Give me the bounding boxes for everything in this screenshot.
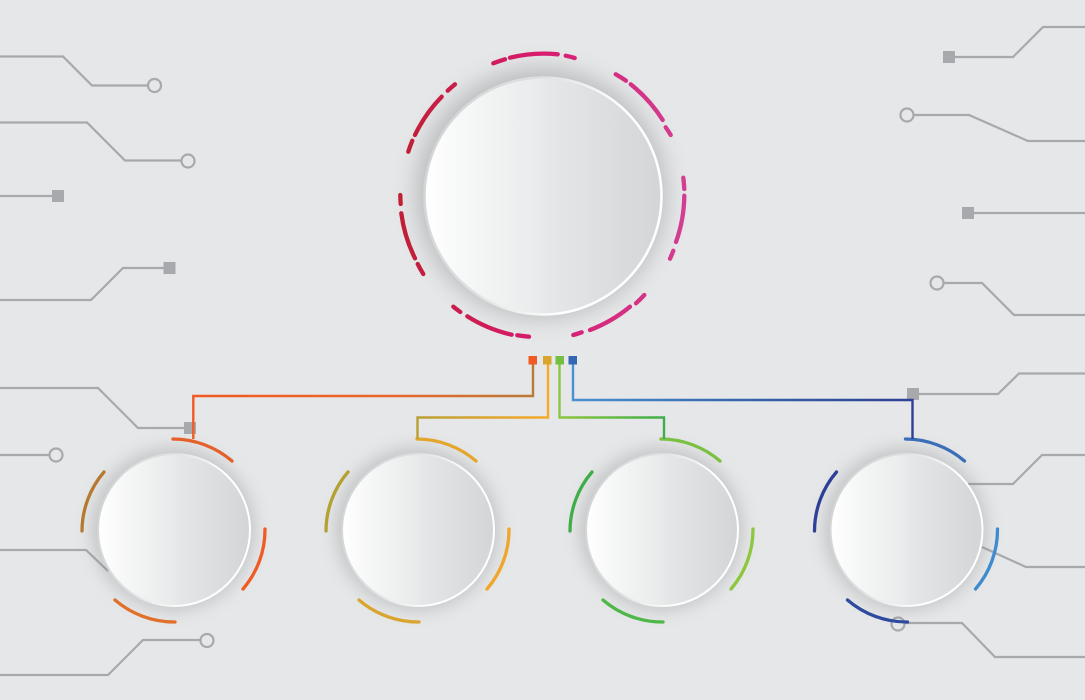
- main circle dashed ring: [400, 54, 684, 337]
- node circle 1: orange: [82, 439, 265, 622]
- trace: right 3 with square node: [962, 207, 1085, 219]
- node circle 2: gold: [326, 439, 509, 622]
- connector: orange: [193, 356, 537, 439]
- connector: green: [556, 356, 664, 439]
- trace: right 1 with square node: [943, 27, 1085, 63]
- trace: right 2 with round node: [900, 108, 1085, 141]
- trace: right 6: [968, 455, 1085, 484]
- circuit traces: left side: [0, 56, 214, 675]
- main circle: [417, 69, 665, 317]
- trace: right 7: [982, 547, 1085, 567]
- trace: left 2 with round node: [0, 122, 194, 168]
- trace: left 7: [0, 550, 108, 571]
- trace: left 8 with round node: [0, 634, 214, 675]
- trace: left 1 with round node: [0, 56, 161, 92]
- trace: left 4 with square node: [0, 262, 176, 300]
- connector: gold: [418, 356, 552, 439]
- circuit traces: right side: [892, 27, 1085, 657]
- connector: blue: [568, 356, 912, 439]
- trace: right 8 with round node: [892, 618, 1085, 657]
- trace: right 5 with square node: [907, 374, 1085, 400]
- trace: left 6 with round node: [0, 448, 62, 462]
- trace: right 4 with round node: [930, 276, 1085, 315]
- node circle 4: blue: [814, 439, 998, 622]
- trace: left 5 with square node: [0, 388, 196, 434]
- node circle 3: green: [570, 439, 753, 622]
- trace: left 3 with square node: [0, 190, 64, 202]
